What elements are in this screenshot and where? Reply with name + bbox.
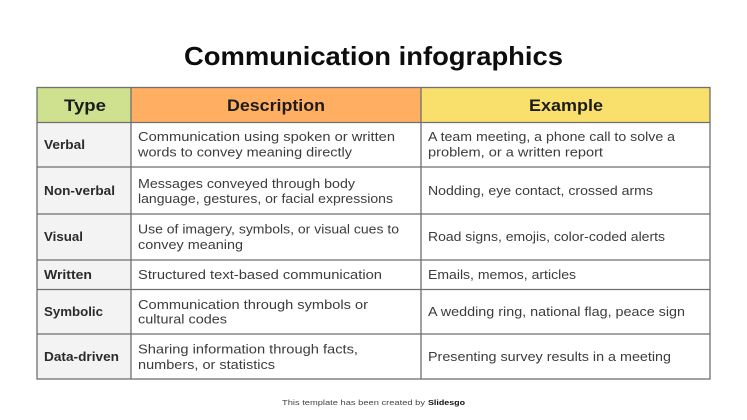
header cell: Example: Example	[529, 96, 603, 115]
row: Symbolic: Symbolic	[44, 304, 103, 319]
title: Communication infographics	[184, 41, 563, 71]
row: Written: Structured text-based communication	[138, 267, 382, 282]
row: Visual	[44, 222, 666, 252]
row: Non-verbal: Non-verbal	[44, 183, 115, 198]
row: Verbal: Verbal	[44, 137, 85, 152]
row: Non-verbal: Messages conveyed through body	[138, 176, 356, 191]
type column background	[37, 122, 131, 379]
row: Data-driven: Sharing information through facts,	[138, 342, 358, 356]
row: Visual: Visual	[44, 229, 83, 244]
header cell: Type: Type	[64, 96, 106, 115]
footer credit	[282, 398, 465, 407]
row: Data-driven: Data-driven	[44, 349, 119, 364]
row: Verbal: Communication using spoken or written	[138, 129, 395, 144]
row: Symbolic: A wedding ring, national flag, peace sign	[428, 304, 685, 319]
row: Non-verbal: language, gestures, or facial expressions	[138, 191, 394, 206]
row: Non-verbal: Nodding, eye contact, crossed arms	[428, 183, 654, 198]
row: Written: Emails, memos, articles	[428, 267, 577, 282]
row: Data-driven: Presenting survey results in a meeting	[428, 349, 671, 364]
row: Written	[44, 267, 577, 282]
row: Written: Written	[44, 267, 92, 282]
header cell: Type	[37, 88, 131, 122]
row: Visual: convey meaning	[138, 237, 243, 252]
row: Data-driven: numbers, or statistics	[138, 357, 276, 372]
row: Visual: Use of imagery, symbols, or visual cues to	[138, 222, 399, 236]
row: Symbolic: cultural codes	[138, 312, 228, 326]
row: Verbal: words to convey meaning directly	[137, 144, 353, 160]
row: Non-verbal	[44, 176, 654, 206]
row: Verbal: A team meeting, a phone call to solve a	[428, 129, 676, 144]
footer credit: Slidesgo	[428, 398, 465, 407]
row: Symbolic	[44, 297, 685, 326]
footer credit: This template has been created by	[282, 398, 425, 407]
table	[37, 88, 710, 379]
row: Visual: Road signs, emojis, color-coded alerts	[428, 229, 666, 244]
row: Data-driven	[44, 342, 671, 372]
row: Verbal: problem, or a written report	[428, 144, 603, 160]
header cell: Example	[421, 88, 710, 122]
row: Verbal	[44, 129, 676, 160]
header cell: Description: Description	[227, 96, 325, 115]
row: Symbolic: Communication through symbols or	[138, 297, 369, 312]
table grid	[37, 88, 710, 379]
header cell: Description	[131, 88, 421, 122]
